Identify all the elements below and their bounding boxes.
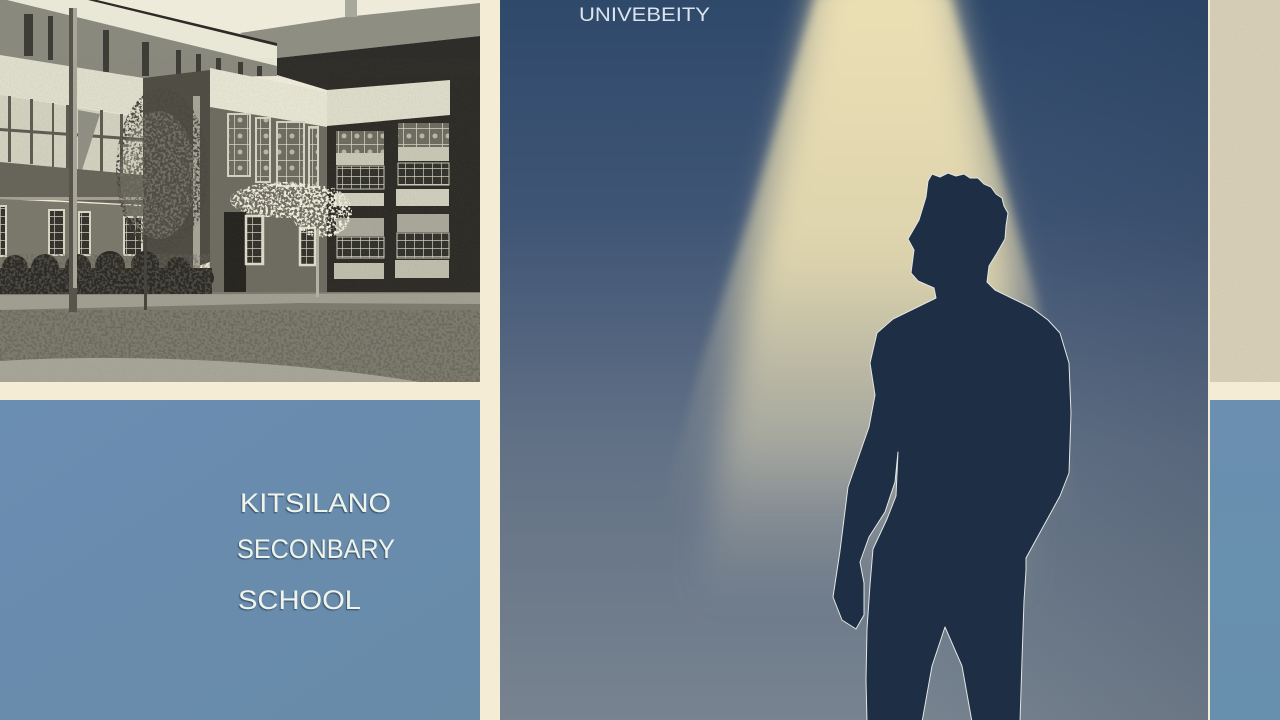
flagpole bbox=[69, 8, 77, 312]
building: entrance door bbox=[224, 212, 246, 294]
photo: school building bbox=[0, 0, 480, 382]
spotlight: inner beam bbox=[702, 0, 1038, 577]
chimney bbox=[345, 0, 357, 17]
building: centre brick wall bbox=[210, 107, 327, 292]
panel: university spotlight bbox=[500, 0, 1208, 720]
building: entrance side windows bbox=[246, 216, 315, 265]
tree: left canopy bbox=[116, 96, 200, 310]
building: dark upper band bbox=[277, 36, 480, 90]
hedge bbox=[0, 251, 214, 294]
building: centre windows bbox=[228, 114, 318, 187]
building: upper right roof band bbox=[240, 3, 480, 58]
building: centre tower bbox=[143, 70, 210, 285]
spotlight: outer beam bbox=[684, 0, 1044, 457]
building: centre pale band bbox=[210, 68, 327, 127]
walkway bbox=[0, 293, 480, 310]
tree: flowering bbox=[230, 182, 352, 297]
film grain bbox=[0, 58, 448, 266]
lawn bbox=[0, 292, 480, 382]
label: school name bbox=[237, 488, 395, 615]
building: right windows and panels bbox=[334, 123, 449, 279]
label: school name: SCHOOL bbox=[238, 585, 361, 615]
panel: blue school label panel bbox=[0, 400, 480, 720]
building: right dark wall bbox=[327, 78, 480, 292]
panel: right blue strip bbox=[1210, 400, 1280, 720]
foreground path bbox=[0, 358, 420, 382]
building: white fascia bbox=[7, 0, 277, 66]
figure: silhouette looking up at the light bbox=[833, 173, 1071, 720]
building: right white band bbox=[327, 80, 450, 126]
label: university: UNIVEBEITY bbox=[579, 5, 710, 26]
building: upper window mullions bbox=[24, 14, 262, 77]
panel: right textured paper bbox=[1210, 0, 1280, 382]
label: school name: SECONBARY bbox=[237, 534, 395, 564]
building: left white band bbox=[0, 55, 143, 117]
sky bbox=[0, 0, 480, 120]
building: left brick band bbox=[0, 162, 143, 205]
building: left lower windows bbox=[0, 206, 142, 256]
building: left lower brick wall bbox=[0, 199, 143, 268]
lawn texture bbox=[0, 310, 480, 382]
building: left large windows bbox=[0, 95, 143, 175]
building: left upper window strip bbox=[0, 0, 277, 78]
label: school name: KITSILANO bbox=[240, 488, 391, 518]
